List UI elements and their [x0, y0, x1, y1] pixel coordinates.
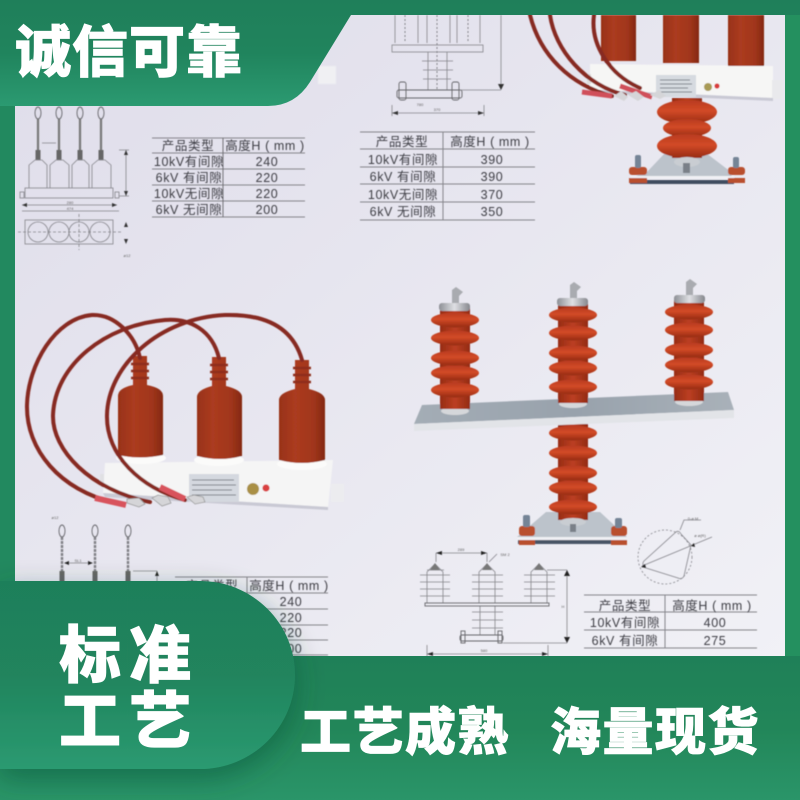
table: top-left specifications: 240	[256, 155, 278, 169]
badge: 标准工艺	[0, 581, 295, 769]
drawing: top-centre side elevation: 780	[417, 102, 424, 107]
product photo: three-phase arrester with red cables	[27, 315, 344, 510]
table: top-centre specifications: 10kV无间隙	[368, 188, 438, 202]
table: top-left specifications: 220	[256, 187, 278, 201]
table: bottom-left specifications: 220	[280, 626, 302, 640]
table: top-centre specifications: 390	[481, 153, 503, 167]
table: bottom-right specifications: 产品类型	[599, 599, 651, 613]
drawing: bottom-left dimension diagram: ø12	[52, 515, 59, 520]
table: top-left specifications: 产品类型	[162, 139, 214, 153]
table: bottom-left specifications: 240	[280, 595, 302, 609]
table: bottom-left specifications	[175, 577, 329, 656]
table: top-centre specifications: 10kV有间隙	[368, 153, 438, 167]
drawing: top-centre side elevation	[392, 15, 504, 116]
table: top-centre specifications: 6kV 有间隙	[370, 170, 436, 184]
insulator: left	[431, 287, 479, 415]
table: top-centre specifications	[360, 132, 535, 220]
slogan: 海量现货: 海量现货	[550, 704, 760, 761]
table: bottom-left specifications: 高度H ( mm )	[249, 578, 329, 593]
table: bottom-right specifications: 400	[704, 616, 726, 630]
table: bottom-right specifications: 275	[704, 634, 726, 648]
drawing: triangular base plan: ø ø(R)	[694, 533, 706, 538]
table: top-centre specifications: 370	[481, 188, 503, 202]
drawing: T-bracket elevation diagram	[420, 547, 570, 660]
drawing: top-centre side elevation: 370	[434, 107, 441, 112]
faint smudge near header	[318, 66, 336, 84]
table: top-centre specifications: 产品类型	[376, 135, 428, 149]
table: top-centre specifications: 350	[481, 205, 503, 219]
table: top-centre specifications: 390	[481, 170, 503, 184]
table: bottom-right specifications: 6kV 有间隙	[592, 634, 658, 648]
product photo: T-bracket arrester with porcelain-style insulators	[414, 279, 734, 545]
footer band	[0, 656, 800, 800]
table: bottom-left specifications: 200	[280, 642, 302, 656]
drawing: triangular base plan	[638, 516, 712, 584]
steel cross bar	[414, 392, 734, 431]
table: top-left specifications	[152, 138, 305, 217]
drawing: T-bracket elevation diagram: 289	[458, 547, 465, 552]
insulator: lower column on triangular base	[517, 424, 627, 545]
drawing: four-phase dimension diagram: ø12	[124, 253, 131, 258]
table: bottom-right specifications: 10kV有间隙	[590, 616, 660, 630]
badge text: 工艺	[59, 688, 199, 757]
table: top-left specifications: 6kV 有间隙	[156, 171, 222, 185]
table: top-left specifications: 高度H ( mm )	[225, 138, 305, 153]
table: bottom-left specifications: 产品类型	[186, 579, 238, 593]
insulator: centre	[549, 282, 597, 408]
badge text: 标准	[59, 622, 199, 691]
table: top-left specifications: 220	[256, 171, 278, 185]
badge text	[59, 622, 199, 757]
table: top-centre specifications: 6kV 无间隙	[370, 205, 436, 219]
table: top-left specifications: 10kV无间隙	[154, 187, 224, 201]
drawing: four-phase dimension diagram	[18, 107, 131, 258]
drawing: T-bracket elevation diagram: 580	[481, 648, 488, 653]
slogan: 工艺成熟: 工艺成熟	[300, 704, 510, 761]
drawing: bottom-left dimension diagram	[52, 515, 159, 582]
table: bottom-left specifications: 220	[280, 611, 302, 625]
table: top-left specifications: 200	[256, 203, 278, 217]
panel: lavender product background	[15, 15, 785, 660]
title: 诚信可靠: 诚信可靠	[15, 21, 243, 84]
table: bottom-right specifications	[584, 595, 757, 648]
drawing: triangular base plan: 0-ø M	[688, 516, 698, 521]
table: top-centre specifications: 高度H ( mm )	[450, 134, 530, 149]
drawing: T-bracket elevation diagram: SM 2	[500, 552, 510, 557]
table: top-left specifications: 6kV 无间隙	[156, 203, 222, 217]
drawing: four-phase dimension diagram: 280	[67, 200, 74, 205]
header banner	[0, 0, 800, 106]
table: bottom-right specifications: 高度H ( mm )	[672, 598, 752, 613]
table: top-left specifications: 10kV有间隙	[154, 155, 224, 169]
drawing: four-phase dimension diagram: 474	[67, 206, 74, 211]
insulator: right	[665, 279, 713, 406]
product photo: top-right arrester with pole insulator	[530, 15, 783, 184]
drawing: T-bracket elevation diagram: H	[562, 604, 565, 609]
drawing: bottom-left dimension diagram: SL1	[74, 558, 82, 563]
